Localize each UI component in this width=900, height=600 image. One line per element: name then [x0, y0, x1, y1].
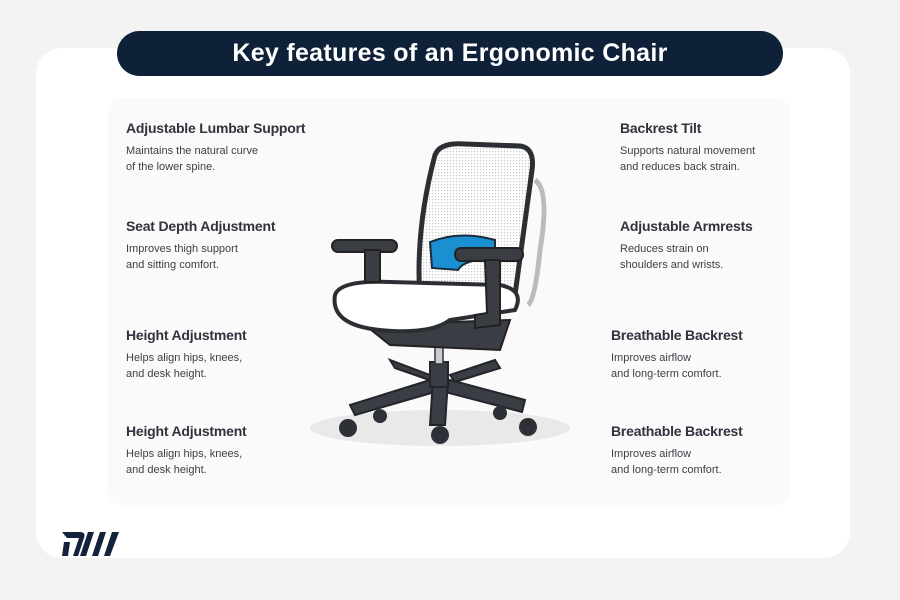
feature: breathable 1: Breathable Backrest	[611, 327, 743, 343]
backrest	[419, 144, 532, 300]
feature: seat depth	[126, 218, 276, 271]
background card	[36, 48, 850, 558]
feature: seat depth: Seat Depth Adjustment	[126, 218, 275, 234]
title: Key features of an Ergonomic Chair	[232, 39, 668, 67]
feature: lumbar	[126, 120, 306, 173]
feature: height 2: Helps align hips, knees,	[126, 448, 242, 460]
feature: breathable 1: and long-term comfort.	[611, 368, 722, 380]
armrests	[332, 240, 397, 252]
feature: breathable 1: Improves airflow	[611, 352, 691, 364]
feature: backrest tilt: and reduces back strain.	[620, 161, 740, 173]
feature: breathable 2: Breathable Backrest	[611, 423, 743, 439]
chair illustration	[310, 141, 570, 446]
inner panel	[108, 98, 790, 505]
lumbar	[430, 235, 495, 270]
feature: breathable 1	[611, 327, 743, 380]
base	[350, 360, 525, 425]
logo	[62, 532, 119, 556]
feature: breathable 2: and long-term comfort.	[611, 464, 722, 476]
backrest shadow	[528, 180, 544, 305]
feature: height 2: Height Adjustment	[126, 423, 247, 439]
seat mechanism	[365, 320, 510, 350]
feature: height 1: and desk height.	[126, 368, 207, 380]
feature: lumbar: of the lower spine.	[126, 161, 215, 173]
feature: armrests: Adjustable Armrests	[620, 218, 753, 234]
feature: height 1: Height Adjustment	[126, 327, 247, 343]
feature: seat depth: and sitting comfort.	[126, 259, 219, 271]
feature: breathable 2: Improves airflow	[611, 448, 691, 460]
feature: breathable 2	[611, 423, 743, 476]
feature: lumbar: Maintains the natural curve	[126, 145, 258, 157]
feature: backrest tilt: Backrest Tilt	[620, 120, 701, 136]
feature: height 2: and desk height.	[126, 464, 207, 476]
title	[117, 31, 783, 76]
seat	[335, 282, 518, 331]
feature: backrest tilt	[620, 120, 756, 173]
feature: height 1: Helps align hips, knees,	[126, 352, 242, 364]
feature: armrests: shoulders and wrists.	[620, 259, 723, 271]
feature: lumbar: Adjustable Lumbar Support	[126, 120, 305, 136]
feature: height 1	[126, 327, 247, 380]
feature: backrest tilt: Supports natural movement	[620, 145, 755, 157]
feature: seat depth: Improves thigh support	[126, 243, 238, 255]
feature: height 2	[126, 423, 247, 476]
feature: armrests: Reduces strain on	[620, 243, 709, 255]
feature: armrests	[620, 218, 753, 271]
